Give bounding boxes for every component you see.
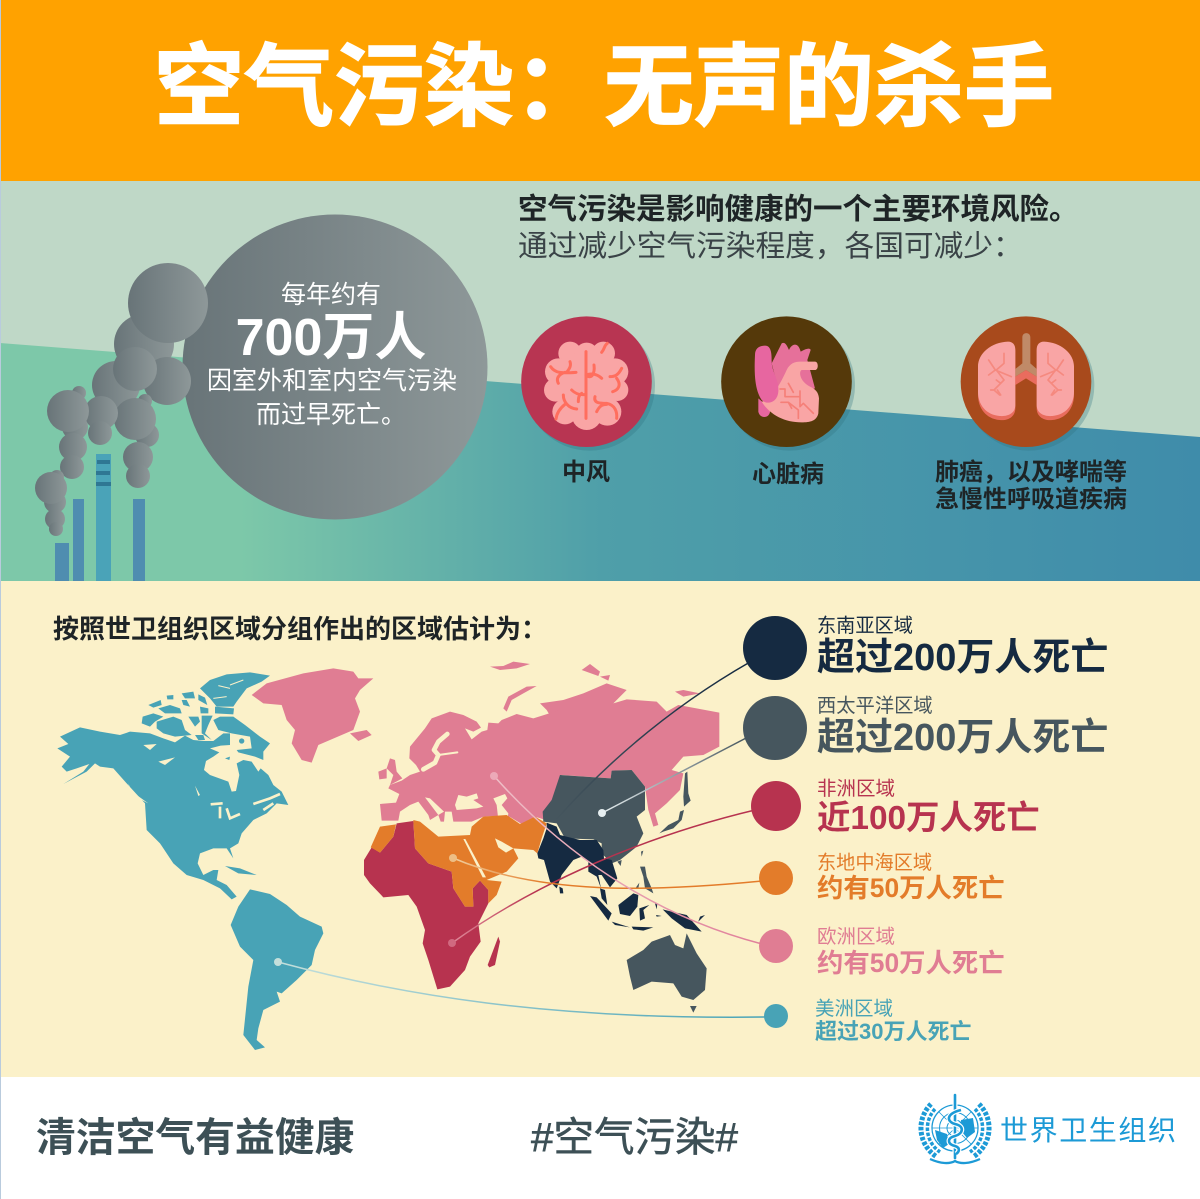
title: 空气污染：无声的杀手 [154, 38, 1054, 138]
connector lines [274, 662, 766, 1017]
map: South-East Asia region [537, 810, 705, 932]
panel: regional estimates background [0, 581, 1200, 1077]
hashtag: #空气污染# [531, 1114, 739, 1160]
condition labels: 急慢性呼吸道疾病 [935, 486, 1127, 513]
map: Western Pacific region [543, 770, 707, 1013]
map: Greenland [252, 668, 373, 763]
page edge [0, 0, 1, 1199]
legend: Africa [751, 778, 1040, 837]
legend: Europe: 约有50万人死亡 [817, 948, 1005, 978]
map: Eastern Mediterranean region [371, 815, 547, 907]
legend: Western Pacific: 西太平洋区域 [817, 695, 933, 717]
legend: Americas: 美洲区域 [815, 998, 893, 1020]
legend: South-East Asia: 超过200万人死亡 [817, 637, 1108, 679]
legend: Western Pacific [743, 695, 1108, 760]
map: Americas [57, 727, 323, 1050]
legend: Americas [764, 998, 971, 1044]
big statistic circle [35, 214, 488, 536]
smoke clouds [35, 263, 208, 536]
map: Europe [378, 710, 560, 825]
condition labels: 心脏病 [752, 461, 824, 488]
legend: Western Pacific: 超过200万人死亡 [817, 717, 1108, 759]
section heading: 按照世卫组织区域分组作出的区域估计为： [53, 614, 547, 644]
organisation name: 世界卫生组织 [1000, 1115, 1178, 1146]
header banner [0, 0, 1200, 181]
map: Africa and Middle East [364, 770, 707, 1013]
legend: South-East Asia: 东南亚区域 [817, 615, 913, 637]
statistic text: 700万人 [236, 309, 426, 367]
panel: health risk background [0, 181, 1200, 581]
legend: Africa: 非洲区域 [817, 778, 895, 800]
legend: Americas: 超过30万人死亡 [815, 1019, 971, 1044]
statistic text: 因室外和室内空气污染 [207, 367, 457, 395]
legend: Africa: 近100万人死亡 [817, 800, 1040, 837]
footer slogan: 清洁空气有益健康 [36, 1116, 354, 1160]
intro text [518, 193, 1079, 263]
statistic text [207, 281, 457, 429]
legend: Eastern Mediterranean [759, 852, 1005, 903]
legend: South-East Asia [743, 615, 1108, 680]
legend: Eastern Mediterranean: 约有50万人死亡 [817, 873, 1005, 903]
condition labels [562, 459, 1127, 513]
legend: Eastern Mediterranean: 东地中海区域 [817, 852, 932, 874]
icon: WHO emblem [921, 1095, 989, 1163]
icon: brain [521, 316, 655, 451]
icon: heart [721, 316, 855, 451]
intro text: 通过减少空气污染程度，各国可减少： [518, 230, 1023, 263]
world map [57, 662, 719, 1050]
statistic text: 每年约有 [281, 281, 381, 309]
condition labels: 中风 [562, 459, 610, 486]
legend: Europe: 欧洲区域 [817, 926, 895, 948]
statistic text: 而过早死亡。 [256, 401, 406, 429]
chimneys [55, 454, 145, 581]
map: Arctic Canada [142, 672, 270, 760]
legend: Europe [759, 926, 1005, 978]
intro text: 空气污染是影响健康的一个主要环境风险。 [518, 193, 1079, 226]
condition labels: 肺癌，以及哮喘等 [935, 459, 1127, 486]
map: Asia part of Europe region [483, 662, 719, 827]
footer panel [0, 1077, 1200, 1199]
icon: lungs [961, 316, 1094, 451]
